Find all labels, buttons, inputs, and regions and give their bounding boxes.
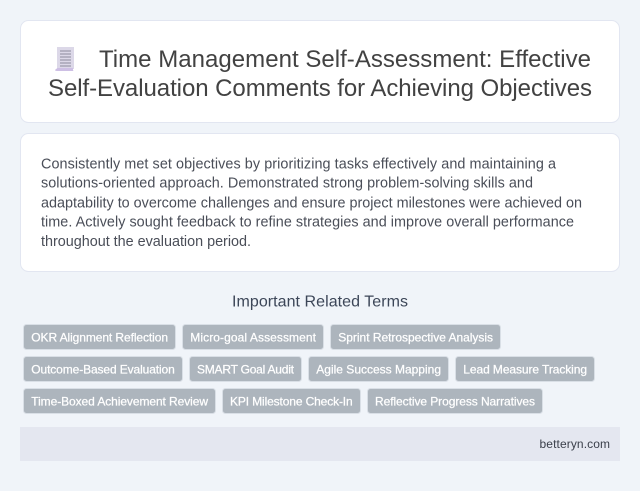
chip: Reflective Progress Narratives (375, 394, 535, 408)
chip: Outcome-Based Evaluation (31, 362, 175, 376)
chip (182, 324, 324, 350)
summary text: Consistently met set objectives by prioritizing tasks effectively and maintaining a (41, 156, 556, 172)
chip: Time-Boxed Achievement Review (31, 394, 208, 408)
chip (308, 356, 448, 382)
summary text: solutions-oriented approach. Demonstrated strong problem-solving skills and (41, 176, 533, 192)
chip (24, 388, 216, 414)
chip (368, 388, 542, 414)
footer source: betteryn.com (540, 437, 610, 451)
title text: Time Management Self-Assessment: Effective (99, 46, 591, 73)
chip: Micro-goal Assessment (190, 330, 317, 344)
chip: SMART Goal Audit (197, 362, 295, 376)
panel: summary card (20, 134, 620, 272)
chip: KPI Milestone Check-In (230, 394, 353, 408)
chip (456, 356, 594, 382)
panel: title card (20, 20, 620, 122)
chip: Agile Success Mapping (316, 362, 441, 376)
title text (48, 46, 592, 102)
chip: Lead Measure Tracking (463, 362, 587, 376)
chip (190, 356, 302, 382)
icon: document scroll (55, 47, 74, 71)
footer bar (20, 427, 620, 461)
chip (330, 324, 500, 350)
summary text: throughout the evaluation period. (41, 234, 251, 250)
summary text: adaptability to overcome challenges and ensure project milestones were achieved on (41, 196, 582, 212)
chip (24, 324, 176, 350)
chips: related terms (24, 324, 594, 414)
summary text: time. Actively sought feedback to refine strategies and improve overall performance (41, 214, 574, 230)
chip (222, 388, 360, 414)
heading: important related terms: Important Related Terms (232, 294, 408, 311)
chip (24, 356, 182, 382)
summary text (41, 156, 582, 250)
chip: Sprint Retrospective Analysis (338, 330, 493, 344)
chip: OKR Alignment Reflection (31, 330, 168, 344)
title text: Self-Evaluation Comments for Achieving Objectives (48, 75, 592, 102)
